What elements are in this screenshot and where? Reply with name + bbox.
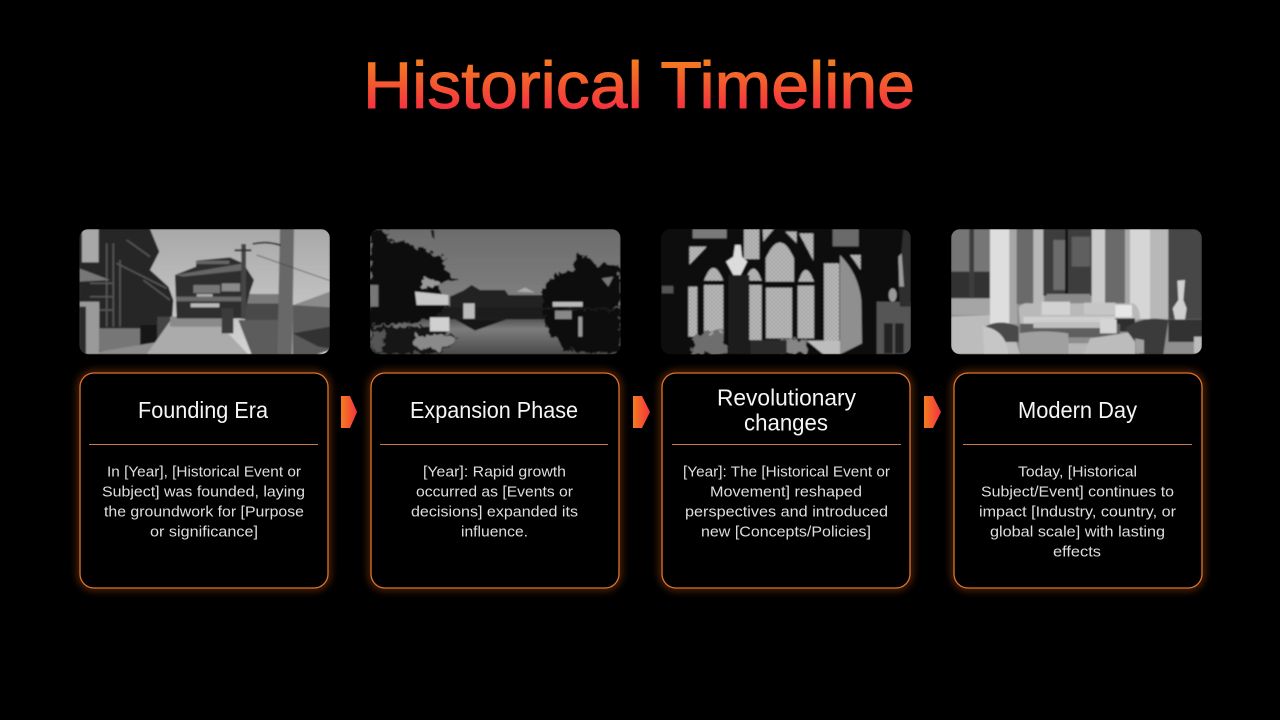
body text: In [Year], [Historical Event or — [107, 464, 301, 480]
card: revolutionary changes — [662, 373, 910, 588]
body text: decisions] expanded its — [411, 504, 578, 520]
heading: Expansion Phase — [410, 397, 578, 423]
body text — [411, 464, 578, 540]
body text: new [Concepts/Policies] — [701, 524, 871, 540]
body text — [683, 464, 890, 540]
heading: Modern Day — [1018, 397, 1137, 423]
body text: global scale] with lasting — [990, 524, 1165, 540]
body text: or significance] — [150, 524, 258, 540]
body text: Subject/Event] continues to — [981, 484, 1174, 500]
panel: expansion phase — [370, 229, 621, 588]
arrow 3 — [924, 396, 941, 428]
photo: old wooden street — [79, 229, 330, 354]
body text: effects — [1053, 544, 1101, 560]
panel: revolutionary changes — [661, 229, 911, 588]
body text — [102, 464, 305, 540]
photo: palace and lake — [370, 229, 621, 354]
panel: modern day — [951, 229, 1202, 588]
body text: occurred as [Events or — [416, 484, 573, 500]
body text: impact [Industry, country, or — [979, 504, 1176, 520]
body text: [Year]: Rapid growth — [423, 464, 566, 480]
photo: modern living room — [951, 229, 1202, 354]
body text — [979, 464, 1176, 560]
panel: founding era — [79, 229, 330, 588]
card: founding era — [80, 373, 328, 588]
card: expansion phase — [371, 373, 619, 588]
heading: changes — [744, 410, 828, 436]
body text: the groundwork for [Purpose — [104, 504, 304, 520]
body text: perspectives and introduced — [685, 504, 888, 520]
arrow 2 — [633, 396, 650, 428]
body text: Subject] was founded, laying — [102, 484, 305, 500]
card: modern day — [954, 373, 1202, 588]
heading: Founding Era — [138, 397, 269, 423]
body text: Movement] reshaped — [710, 484, 862, 500]
body text: Today, [Historical — [1018, 464, 1137, 480]
heading: Revolutionary — [717, 384, 856, 410]
arrow 1 — [341, 396, 357, 428]
body text: [Year]: The [Historical Event or — [683, 464, 890, 480]
body text: influence. — [461, 524, 528, 540]
heading — [717, 384, 856, 436]
photo: gothic window interior — [661, 229, 911, 354]
title: Historical Timeline — [363, 48, 915, 122]
